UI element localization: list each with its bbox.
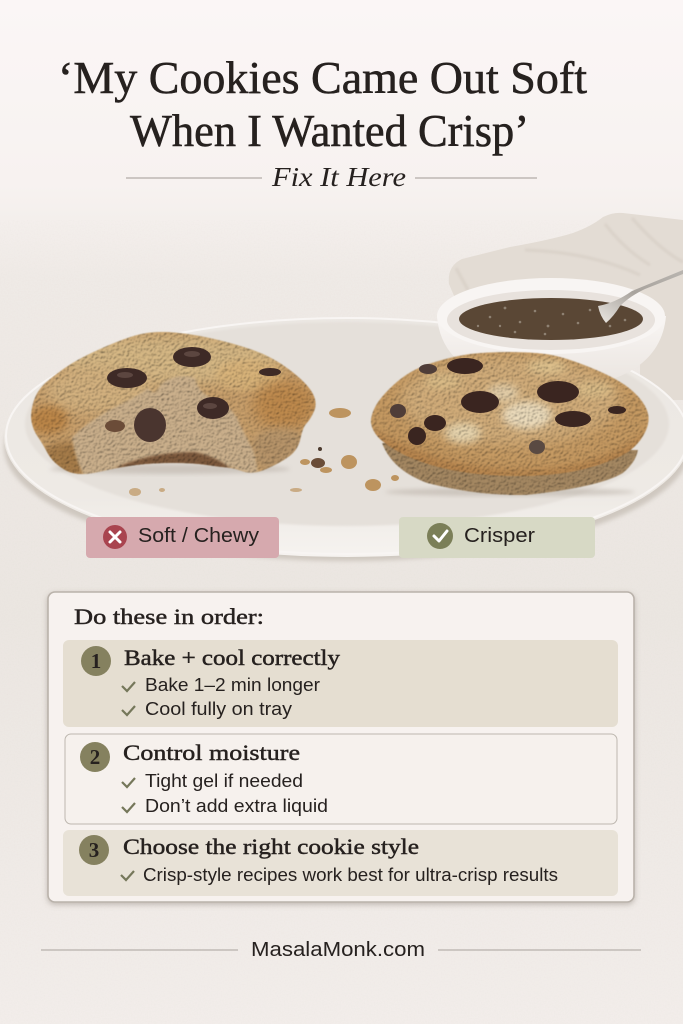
label: crisper <box>399 517 595 558</box>
step 2: Control moisture <box>123 740 300 765</box>
step 1: Bake + cool correctly <box>124 645 340 670</box>
number badge 3: 3 <box>89 838 99 862</box>
checklist item: Crisp-style recipes work best for ultra-crisp results <box>143 865 558 885</box>
number badge 2 <box>80 742 110 772</box>
crumbs <box>129 408 399 496</box>
chocolate chips <box>390 358 626 454</box>
label: crisper: Crisper <box>464 525 535 547</box>
footer: MasalaMonk.com <box>251 939 425 961</box>
plate <box>4 317 683 561</box>
step 3: Choose the right cookie style <box>123 834 419 859</box>
panel: steps card <box>48 592 634 902</box>
checklist item: Tight gel if needed <box>145 771 303 791</box>
spoon <box>598 270 683 323</box>
title: When I Wanted Crisp’ <box>130 105 529 156</box>
icon: x mark <box>103 525 127 549</box>
title <box>58 52 587 156</box>
checklist item: Don’t add extra liquid <box>145 796 328 816</box>
chocolate chips <box>105 347 281 442</box>
number badge 3 <box>79 835 109 865</box>
number badge 1: 1 <box>91 649 101 673</box>
napkin <box>449 213 683 400</box>
step 2 <box>65 734 617 824</box>
number badge 2: 2 <box>90 745 100 769</box>
subtitle: fix it here: Fix It Here <box>271 162 406 192</box>
icon: check mark <box>427 523 453 549</box>
cookie: soft / chewy with bite <box>30 331 316 475</box>
label: soft / chewy: Soft / Chewy <box>138 525 259 547</box>
bowl of chia gel <box>437 270 683 390</box>
bitten crumb interior <box>72 376 258 478</box>
label: soft / chewy <box>86 517 279 558</box>
step 1 <box>63 640 618 727</box>
title: ‘My Cookies Came Out Soft <box>58 52 587 103</box>
checklist item: Cool fully on tray <box>145 699 292 719</box>
card heading: Do these in order: <box>74 604 264 629</box>
cookie: crisper <box>365 345 655 496</box>
checklist item: Bake 1–2 min longer <box>145 675 320 695</box>
number badge 1 <box>81 646 111 676</box>
step 3 <box>63 830 618 896</box>
